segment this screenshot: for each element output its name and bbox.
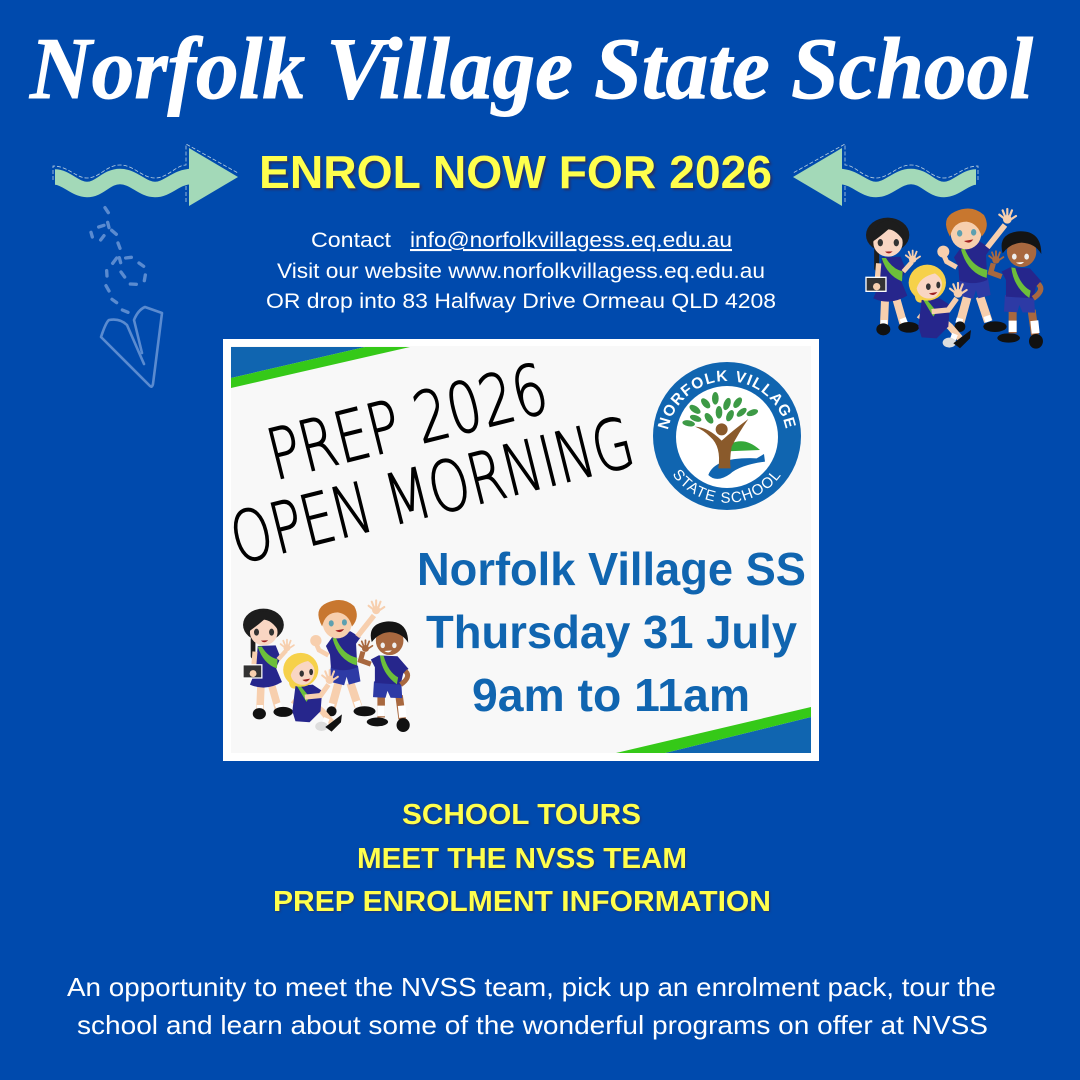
text block: event highlights: PREP ENROLMENT INFORMATION: [273, 886, 771, 918]
poster text: event details: Thursday 31 July: [426, 606, 797, 658]
heading: enrol now: ENROL NOW FOR 2026: [259, 146, 772, 198]
text block: description: [67, 972, 996, 1040]
text block: contact details: Visit our website www.norfolkvillagess.eq.edu.au: [277, 260, 765, 283]
text block: event highlights: SCHOOL TOURS: [402, 799, 641, 831]
poster text: event details: 9am to 11am: [472, 669, 750, 721]
icon: paper plane with dashed flight path: [91, 208, 162, 387]
poster text: event details: [417, 543, 806, 721]
illustration: school children top right: [866, 209, 1043, 349]
icon: school logo: [653, 362, 801, 510]
arrow: left wavy arrow pointing right: [53, 144, 238, 206]
text block: description: An opportunity to meet the NVSS team, pick up an enrolment pack, tour the: [67, 972, 996, 1002]
text block: contact details: OR drop into 83 Halfway Drive Ormeau QLD 4208: [266, 290, 776, 313]
poster heading: prep 2026 open morning: OPEN MORNING: [222, 401, 642, 580]
icon: school logo: NORFOLK VILLAGE: [658, 370, 796, 430]
text block: contact details: Contact: [311, 229, 391, 252]
icon: school logo: STATE SCHOOL: [674, 470, 781, 503]
title: Norfolk Village State School: [29, 21, 1034, 118]
text block: description: school and learn about some of the wonderful programs on offer at NVSS: [77, 1010, 988, 1040]
arrow: right wavy arrow pointing left: [793, 144, 978, 206]
illustration: school children in poster: [243, 600, 410, 732]
poster text: event details: Norfolk Village SS: [417, 543, 806, 595]
text block: contact details: [266, 229, 776, 313]
panel: open morning poster: [222, 339, 819, 761]
text block: event highlights: [273, 799, 771, 918]
text block: event highlights: MEET THE NVSS TEAM: [357, 843, 687, 875]
text block: contact details: info@norfolkvillagess.eq.edu.au: [410, 229, 732, 252]
poster heading: prep 2026 open morning: PREP 2026: [259, 348, 556, 496]
